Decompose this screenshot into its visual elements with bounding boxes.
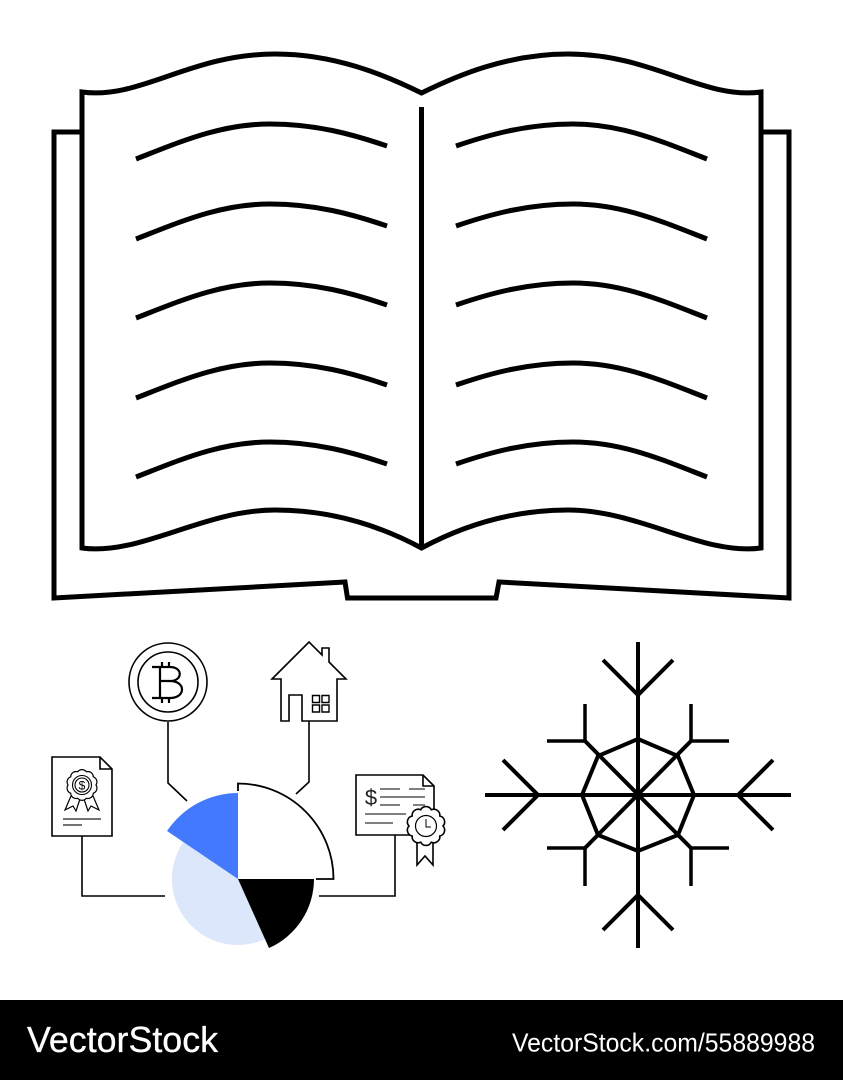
book cover [54, 132, 789, 598]
pie slice: white outlined [238, 784, 334, 879]
footer brand name: VectorStock [27, 1019, 219, 1060]
book pages outline [82, 54, 761, 549]
right page text lines [456, 124, 707, 477]
pie chart with connected finance icons [52, 642, 445, 948]
connector lines [82, 721, 395, 896]
pie slice: light blue [172, 842, 265, 945]
pie chart [167, 784, 334, 948]
snowflake main axes [485, 642, 791, 948]
icon: certificate document with medal: $ [79, 778, 86, 792]
left page text lines [136, 124, 387, 477]
pie slice: black [238, 879, 314, 948]
snowflake diagonals [585, 741, 691, 848]
snowflake arrow branches [503, 660, 773, 930]
snowflake corner forks [547, 704, 729, 886]
pie slice: blue [167, 793, 238, 879]
icon: financial contract with clock seal [356, 775, 445, 865]
book spine line [419, 107, 424, 548]
icon: house [272, 642, 346, 721]
snowflake central octagon [582, 739, 694, 851]
icon: bitcoin coin [129, 643, 207, 721]
icon: certificate document with medal [52, 757, 112, 836]
icon: financial contract with clock seal: $ [365, 785, 377, 810]
icon: snowflake [485, 642, 791, 948]
illustration: open book [54, 54, 789, 598]
footer bar [0, 1000, 843, 1080]
footer image id: VectorStock.com/55889988 [512, 1028, 815, 1058]
